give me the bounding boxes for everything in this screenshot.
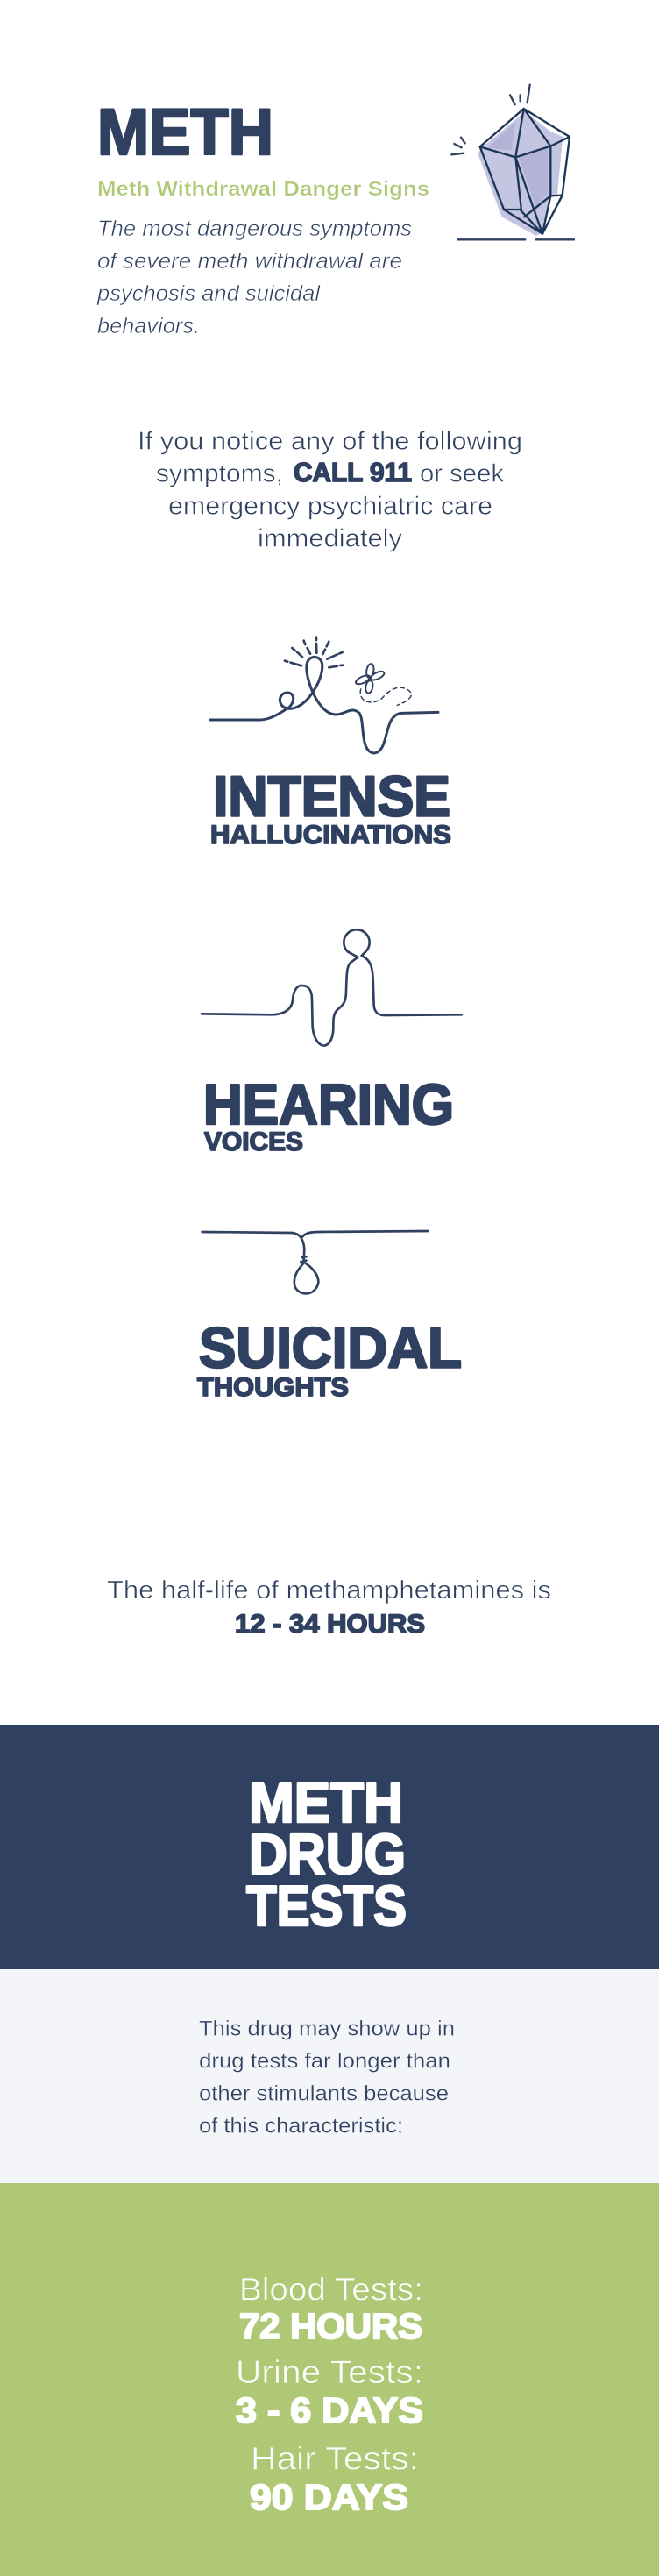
panel: detection windows <box>0 2183 659 2576</box>
panel: explanation <box>0 1969 659 2183</box>
banner heading: TESTS <box>246 1874 407 1938</box>
sign: suicidal thoughts <box>197 1231 462 1402</box>
sign: hearing voices <box>202 929 462 1156</box>
call to action text: If you notice any of the following <box>138 428 522 456</box>
banner heading <box>246 1770 407 1938</box>
explanation text: of this characteristic: <box>199 2115 403 2138</box>
heading: suicidal: SUICIDAL <box>199 1315 462 1380</box>
icon: line forming a listening figure <box>202 929 462 1046</box>
heading: hearing: HEARING <box>203 1072 454 1136</box>
explanation text <box>199 2017 455 2138</box>
subtitle: Meth Withdrawal Danger Signs <box>97 177 429 200</box>
call to action text: CALL 911 <box>294 457 412 487</box>
subheading: hallucinations: HALLUCINATIONS <box>210 821 451 850</box>
half-life value: 12 - 34 HOURS <box>235 1610 425 1639</box>
intro paragraph: of severe meth withdrawal are <box>97 249 402 274</box>
half-life statement <box>107 1576 551 1639</box>
icon: line forming a noose <box>202 1231 428 1293</box>
call to action text: emergency psychiatric care <box>168 493 492 521</box>
panel: meth drug tests banner <box>0 1725 659 1969</box>
intro paragraph: The most dangerous symptoms <box>97 217 412 241</box>
header panel <box>96 85 574 338</box>
title: METH: METH <box>97 96 273 168</box>
urine tests: 3 - 6 DAYS <box>236 2390 423 2430</box>
urine tests <box>236 2354 423 2430</box>
call to action text: or seek <box>420 459 505 487</box>
intro paragraph <box>96 217 412 338</box>
half-life statement: The half-life of methamphetamines is <box>107 1576 551 1605</box>
hair tests <box>250 2441 419 2517</box>
icon: crystal <box>451 85 574 239</box>
banner heading: DRUG <box>249 1822 406 1886</box>
blood tests: Blood Tests: <box>239 2271 423 2308</box>
sign: intense hallucinations <box>210 637 451 850</box>
call to action text <box>138 428 522 552</box>
call to action text: symptoms, <box>156 459 283 487</box>
explanation text: This drug may show up in <box>199 2017 455 2041</box>
subheading: voices: VOICES <box>204 1128 303 1156</box>
hair tests: 90 DAYS <box>250 2477 408 2517</box>
heading: intense: INTENSE <box>213 765 450 828</box>
explanation text: other stimulants because <box>199 2081 449 2106</box>
icon: hallucination line with light and butterfly <box>210 637 438 753</box>
blood tests <box>239 2271 423 2346</box>
subheading: thoughts: THOUGHTS <box>197 1373 349 1402</box>
blood tests: 72 HOURS <box>239 2306 422 2346</box>
urine tests: Urine Tests: <box>236 2354 423 2390</box>
hair tests: Hair Tests: <box>251 2441 419 2476</box>
call to action text: immediately <box>258 524 403 552</box>
intro paragraph: psychosis and suicidal <box>96 281 321 306</box>
banner heading: METH <box>249 1770 403 1834</box>
explanation text: drug tests far longer than <box>199 2050 450 2073</box>
intro paragraph: behaviors. <box>97 314 200 338</box>
